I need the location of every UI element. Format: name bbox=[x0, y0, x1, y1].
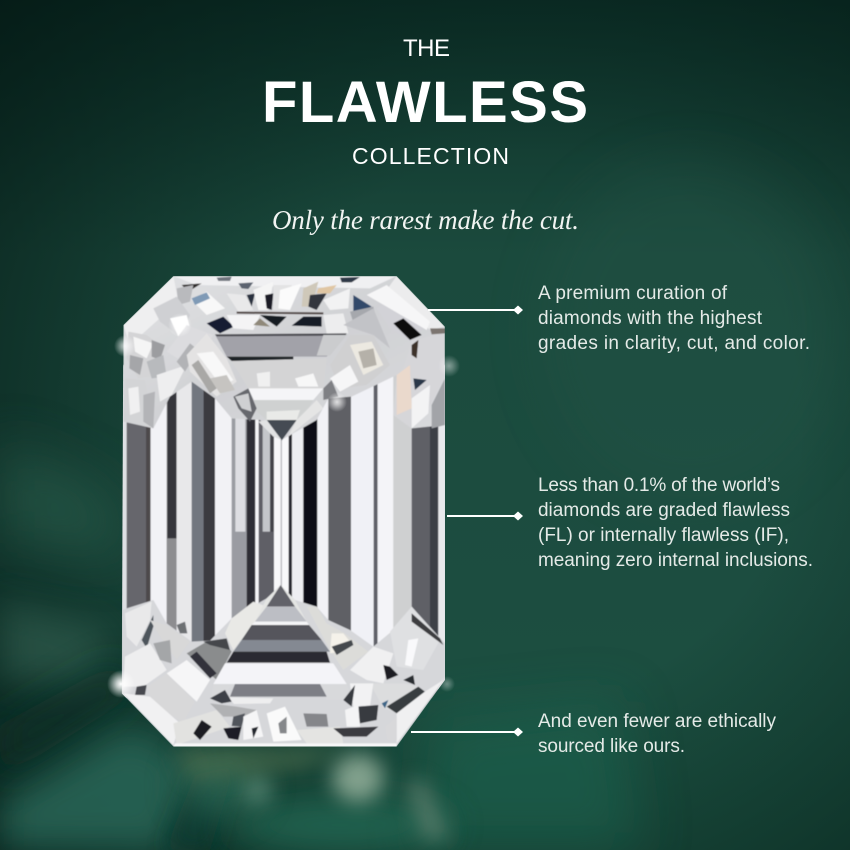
callout 1: premium curation: grades in clarity, cut, and color. bbox=[538, 333, 810, 354]
callout 2: rarity: Less than 0.1% of the world’s bbox=[538, 475, 780, 496]
callout 3: ethically sourced: sourced like ours. bbox=[538, 736, 685, 757]
callout 2: rarity: meaning zero internal inclusions. bbox=[538, 550, 813, 571]
heading: THE: THE bbox=[403, 35, 450, 62]
heading: FLAWLESS: FLAWLESS bbox=[262, 70, 588, 135]
callout 2: rarity: (FL) or internally flawless (IF), bbox=[538, 525, 789, 546]
title bbox=[262, 35, 588, 169]
diamond bbox=[122, 276, 447, 747]
callout 2: rarity: diamonds are graded flawless bbox=[538, 500, 790, 521]
callout 3: ethically sourced bbox=[411, 711, 776, 757]
heading: COLLECTION: COLLECTION bbox=[352, 143, 509, 169]
callout 1: premium curation: A premium curation of bbox=[538, 283, 728, 304]
callout 1: premium curation bbox=[428, 283, 810, 354]
crown facets bbox=[123, 276, 445, 441]
vertical step facets bbox=[122, 365, 447, 698]
pavilion facets bbox=[122, 585, 445, 747]
callout 3: ethically sourced: And even fewer are ethically bbox=[538, 711, 776, 732]
callout 1: premium curation: diamonds with the highest bbox=[538, 308, 763, 329]
tagline: Only the rarest make the cut. bbox=[272, 205, 579, 235]
callout 2: rarity bbox=[447, 475, 813, 571]
sparkles bbox=[107, 313, 460, 698]
